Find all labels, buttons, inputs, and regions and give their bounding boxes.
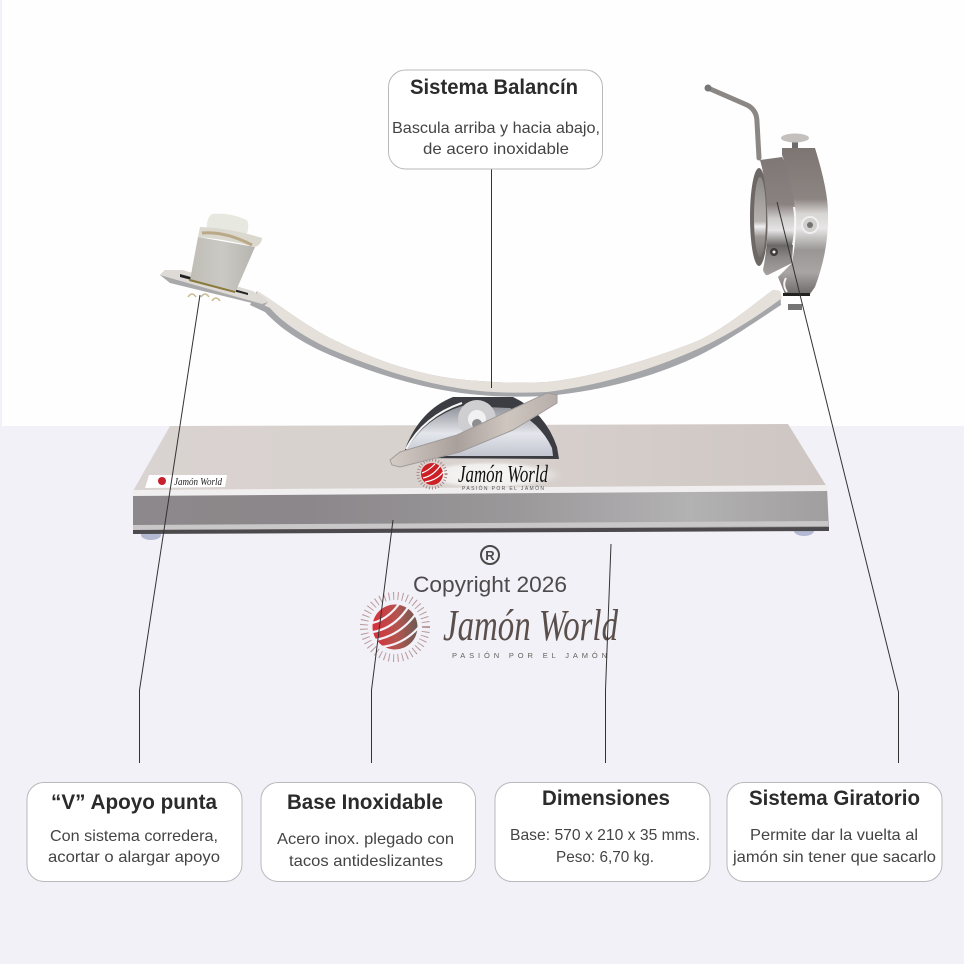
description: Base: 570 x 210 x 35 mms.: [510, 827, 700, 844]
panel: Base Inoxidable: [261, 782, 476, 882]
heading: Sistema Giratorio: [749, 787, 920, 810]
description: [277, 831, 454, 870]
ham stand product photo: [132, 84, 829, 540]
rotating ring and handle: [704, 84, 828, 310]
ring opening: [750, 168, 768, 266]
description: Permite dar la vuelta al: [750, 827, 918, 844]
leader: V Apoyo punta: [140, 295, 200, 763]
heading: “V” Apoyo punta: [51, 791, 217, 814]
leader: Dimensiones: [606, 544, 611, 763]
brand logo printed on base: PASIÓN POR EL JAMÓN: [462, 485, 544, 492]
description: jamón sin tener que sacarlo: [732, 849, 936, 866]
description: Con sistema corredera,: [50, 828, 218, 845]
description: Peso: 6,70 kg.: [556, 849, 654, 866]
small brand label on base: Jamón World: [174, 476, 222, 488]
description: [510, 827, 700, 866]
logo tagline: PASIÓN POR EL JAMÓN: [452, 651, 607, 660]
curved rocker arm: [160, 270, 782, 397]
panel: Dimensiones: [495, 782, 710, 882]
panel: V Apoyo punta: [27, 782, 242, 882]
ring small screw: [770, 248, 778, 256]
logo sun emblem: [364, 596, 426, 658]
registered mark: [481, 546, 499, 564]
description: Acero inox. plegado con: [277, 831, 454, 848]
description: Bascula arriba y hacia abajo,: [392, 120, 600, 137]
description: [392, 120, 600, 158]
leader lines: [140, 168, 898, 763]
Jamón World logo: [364, 596, 619, 660]
description: [48, 828, 220, 866]
small brand label on base: [145, 475, 227, 488]
logo wordmark: Jamón World: [443, 601, 619, 650]
heading: Sistema Balancín: [410, 76, 578, 99]
background: white upper area: [2, 0, 964, 426]
pivot blade: [390, 393, 557, 467]
brand logo printed on base: Jamón World: [458, 462, 549, 488]
panel: Sistema Balancín: [388, 70, 602, 169]
description: de acero inoxidable: [423, 141, 569, 158]
heading: Base Inoxidable: [287, 791, 443, 814]
V tip support block: [189, 214, 262, 293]
rocker pivot support: [405, 397, 559, 459]
description: tacos antideslizantes: [289, 853, 443, 870]
description: [732, 827, 936, 866]
thumb screw: [781, 134, 809, 150]
registered mark: R: [485, 548, 495, 563]
leader: Base Inoxidable: [372, 520, 393, 763]
ring outer collar: [778, 148, 828, 294]
panel: Sistema Giratorio: [727, 782, 942, 882]
handle rod: [708, 88, 759, 158]
copyright notice: [413, 546, 567, 597]
leader: Sistema Giratorio: [777, 202, 898, 763]
heading: Dimensiones: [542, 787, 670, 810]
description: acortar o alargar apoyo: [48, 849, 220, 866]
leader: Sistema Balancín: [490, 168, 492, 388]
copyright text: Copyright 2026: [413, 572, 567, 597]
ring bolt: [802, 217, 818, 233]
brand logo printed on base: [414, 460, 566, 492]
stand base: [132, 424, 829, 540]
ring front sleeve: [760, 157, 795, 275]
